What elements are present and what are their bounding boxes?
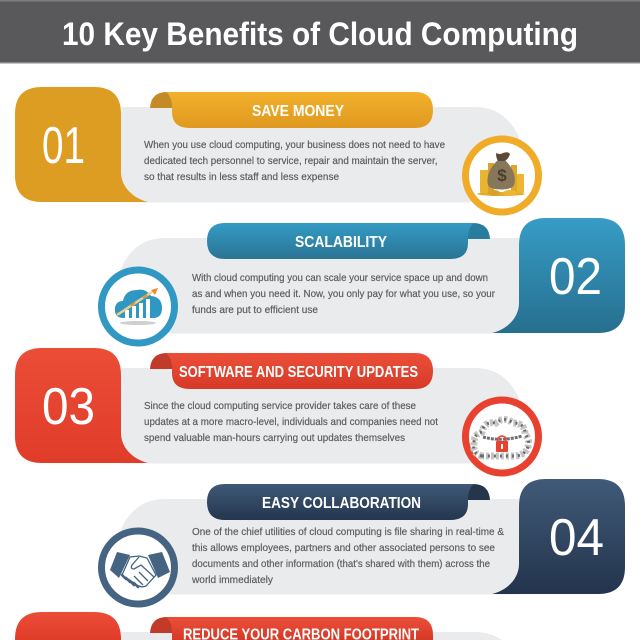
- number badge 03: [15, 348, 148, 463]
- number badge 03: 03: [42, 378, 95, 436]
- panel: scalability: [102, 218, 625, 343]
- number badge 04: [492, 479, 625, 594]
- ribbon heading: software and security updates: SOFTWARE AND SECURITY UPDATES: [179, 364, 418, 381]
- number badge 01: [15, 87, 148, 202]
- description 2: funds are put to efficient use: [192, 304, 318, 316]
- icon: cloud with rising chart: [102, 270, 174, 343]
- description 3: spend valuable man-hours carrying out updates themselves: [144, 432, 405, 444]
- ribbon heading: scalability: [207, 223, 490, 259]
- icon: money bag and coins: $: [497, 166, 507, 185]
- title text: 10 Key Benefits of Cloud Computing: [62, 16, 578, 52]
- number badge 01: 01: [42, 117, 85, 175]
- description 3: [144, 400, 438, 444]
- grey text card 1: [121, 107, 519, 202]
- icon: money bag and coins: [466, 139, 538, 212]
- ribbon heading: scalability: SCALABILITY: [295, 234, 387, 251]
- ribbon heading: save money: [150, 92, 433, 128]
- description 2: With cloud computing you can scale your service space up and down: [192, 272, 488, 284]
- description 1: dedicated tech personnel to service, repair and maintain the server,: [144, 155, 438, 167]
- description 4: [191, 526, 504, 586]
- description 4: world immediately: [191, 574, 274, 586]
- description 3: updates at a more macro-level, individuals and companies need not: [144, 416, 438, 428]
- number badge 05: [15, 612, 121, 640]
- panel: software and security updates: [15, 348, 538, 473]
- number badge 02: [492, 218, 625, 333]
- panel: reduce your carbon footprint: [15, 612, 519, 640]
- grey text card 4: [121, 499, 519, 594]
- grey text card 3: [121, 368, 519, 464]
- description 1: so that results in less staff and less expense: [144, 171, 339, 183]
- description 4: documents and other information (that's shared with them) across the: [192, 558, 490, 570]
- grey text card 5: [121, 632, 519, 640]
- ribbon heading: easy collaboration: [207, 484, 490, 520]
- ribbon heading: easy collaboration: EASY COLLABORATION: [262, 495, 421, 512]
- description 4: One of the chief utilities of cloud computing is file sharing in real-time &: [192, 526, 504, 538]
- description 1: When you use cloud computing, your business does not need to have: [144, 139, 445, 151]
- description 2: as and when you need it. Now, you only pay for what you use, so your: [192, 288, 495, 300]
- number badge 02: 02: [549, 248, 602, 306]
- panel: save money: [15, 87, 538, 212]
- icon: cloud chain and padlock: [466, 400, 538, 473]
- number badge 04: 04: [549, 509, 604, 567]
- icon: handshake: [102, 531, 174, 604]
- ribbon heading: save money: SAVE MONEY: [252, 103, 344, 120]
- panel: easy collaboration: [102, 479, 625, 604]
- description 1: [144, 139, 445, 183]
- ribbon heading: software and security updates: [150, 353, 433, 389]
- ribbon heading: reduce your carbon footprint: [150, 617, 433, 640]
- description 2: [192, 272, 495, 316]
- grey text card 2: [121, 238, 519, 334]
- description 4: this allows employees, partners and other associated persons to see: [192, 542, 495, 554]
- title banner: [0, 0, 640, 64]
- description 3: Since the cloud computing service provider takes care of these: [144, 400, 416, 412]
